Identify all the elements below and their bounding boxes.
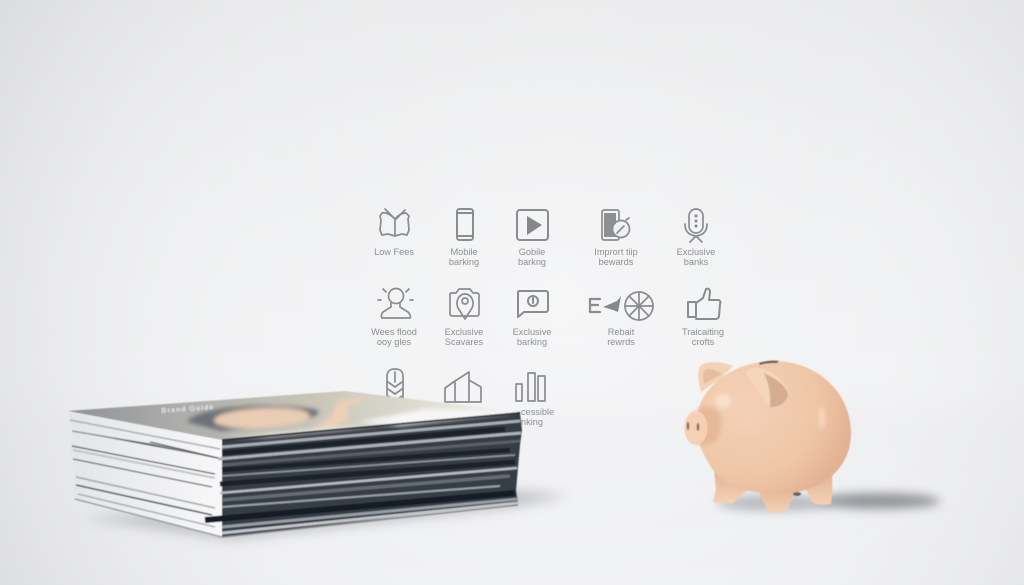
label: rebait rewards: rewrds <box>607 337 635 347</box>
label: mobile banking: barking <box>449 257 479 267</box>
icon: open book <box>380 209 409 236</box>
label: exclusive scavares: Exclusive <box>445 327 483 337</box>
icon: play button <box>517 210 548 240</box>
label: import tip rewards: bewards <box>599 257 634 267</box>
icon: microphone badge <box>685 209 707 242</box>
body <box>697 361 851 494</box>
label: gobile barking: Gobile <box>519 247 545 257</box>
label: low fees: Low Fees <box>374 247 414 257</box>
icon: bar chart <box>516 373 545 401</box>
label: exclusive scavares: Scavares <box>445 337 484 347</box>
right edge pages <box>205 413 522 537</box>
icon: speech bubble <box>518 291 548 317</box>
icon: thumbs up <box>688 289 720 319</box>
label: import tip rewards: Imprort tiip <box>594 247 638 257</box>
label: gobile barking: barkng <box>518 257 546 267</box>
far ear <box>698 362 733 392</box>
coin slot <box>759 361 779 365</box>
snout <box>691 407 721 445</box>
icon: symbols and wheel <box>590 292 653 320</box>
highlights <box>715 394 731 408</box>
icon: mobile phone <box>457 209 473 240</box>
near ear <box>745 368 788 407</box>
label: wees flood: ooy gles <box>377 337 412 347</box>
label: partly hidden text: nking <box>521 417 543 427</box>
icon grid with labels <box>371 209 724 427</box>
label: wees flood: Wees flood <box>371 327 417 337</box>
icon: wheat ear <box>387 369 403 402</box>
shadow under stack <box>80 488 570 540</box>
label: mobile banking: Mobile <box>450 247 478 257</box>
piggy shadow <box>717 493 940 511</box>
icon: buildings <box>445 372 481 402</box>
icon: phone with compass <box>602 210 630 240</box>
label: partly hidden text: cessible <box>521 407 554 417</box>
label: training crofts: Traicaiting <box>682 327 724 337</box>
legs <box>713 468 832 513</box>
label: training crofts: crofts <box>692 337 715 347</box>
label: exclusive banks: Exclusive <box>677 247 715 257</box>
dark gap between legs <box>793 492 801 496</box>
cover photo: face <box>187 397 520 438</box>
label: exclusive banking: Exclusive <box>513 327 551 337</box>
icon: person with rays <box>378 288 413 318</box>
icon: camera with pin <box>450 289 479 319</box>
label: rebait rewards: Rebait <box>608 327 634 337</box>
label: exclusive banks: banks <box>684 257 709 267</box>
label: exclusive banking: barking <box>517 337 547 347</box>
top cover <box>68 391 520 440</box>
cover title: Brand Guide <box>161 404 215 415</box>
stack of brochures <box>68 391 522 537</box>
piggy bank <box>684 361 851 513</box>
left edge pages <box>68 412 222 537</box>
